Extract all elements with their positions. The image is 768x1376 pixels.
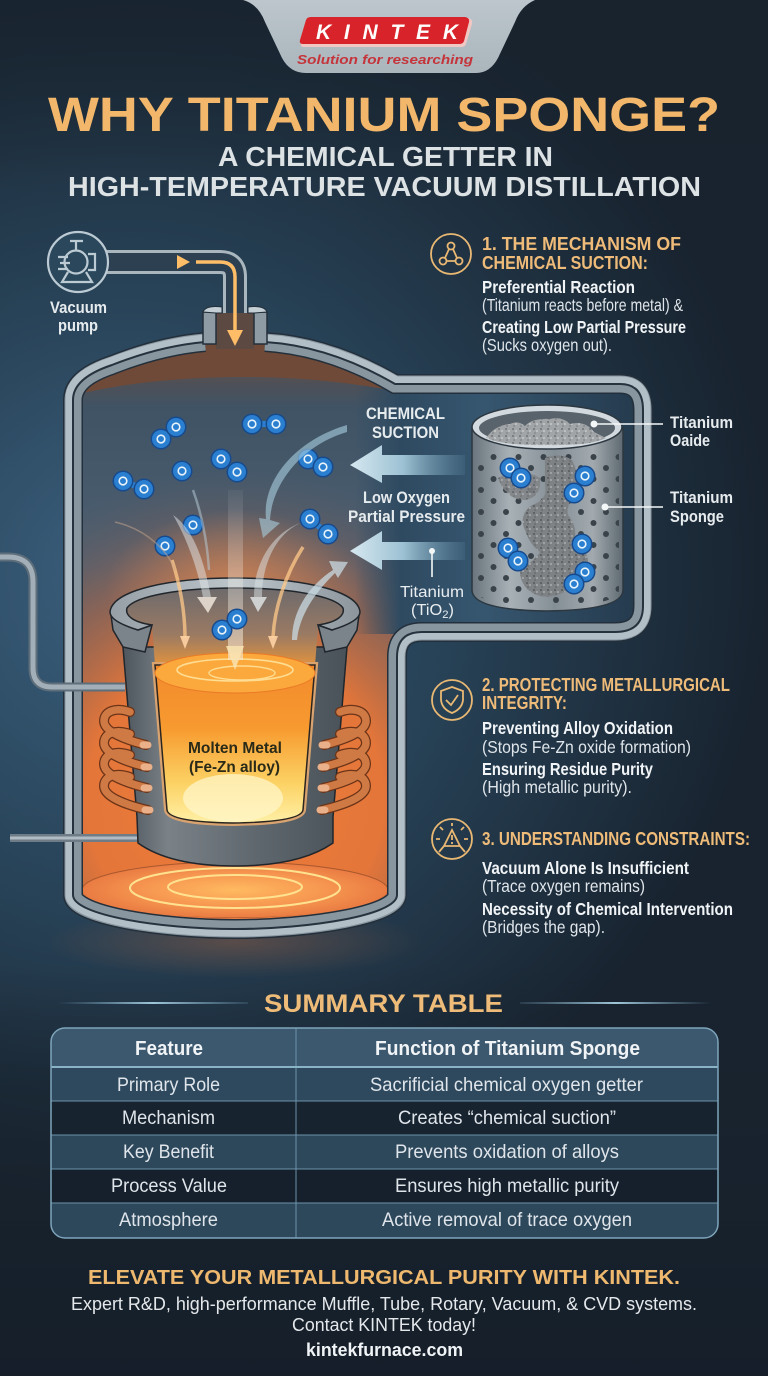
label: vacuum pump (50, 299, 107, 335)
induction coils (104, 710, 366, 810)
arrow: vacuum flow (118, 255, 243, 346)
chamber floor (83, 862, 387, 919)
section 3: constraints: Necessity of Chemical Intervention (482, 899, 733, 919)
logo: KINTEK badge: KINTEK (316, 21, 460, 44)
label: titanium oxide: Oaide (670, 432, 710, 450)
service pipes (0, 557, 137, 838)
label: low oxygen partial pressure: Low Oxygen (363, 489, 450, 507)
table body text: Sacrificial chemical oxygen getter (370, 1074, 643, 1096)
subtitle: HIGH-TEMPERATURE VACUUM DISTILLATION (68, 171, 701, 202)
section 3: constraints: (Bridges the gap). (482, 917, 605, 937)
section 1: mechanism: CHEMICAL SUCTION: (482, 253, 648, 273)
section 1: mechanism: Preferential Reaction (482, 277, 635, 297)
label: molten metal (188, 740, 282, 776)
table body text: Creates “chemical suction” (398, 1107, 616, 1129)
table body text: Atmosphere (119, 1209, 218, 1231)
basket rim and top sponge (472, 405, 622, 449)
label: low oxygen partial pressure: Partial Pressure (348, 508, 465, 526)
chamber wall (69, 338, 647, 933)
section 1: mechanism: (Sucks oxygen out). (482, 335, 612, 355)
section 1: mechanism: Creating Low Partial Pressure (482, 317, 686, 337)
section 1: mechanism: 1. THE MECHANISM OF (482, 234, 681, 254)
section 3: constraints (432, 819, 750, 937)
icon: alert beacon (432, 819, 472, 859)
crucible rim (110, 578, 360, 652)
title: WHY TITANIUM SPONGE? (48, 89, 720, 142)
table body text: Key Benefit (123, 1141, 215, 1163)
footer call to action: Expert R&D, high-performance Muffle, Tube, Rotary, Vacuum, & CVD systems. (71, 1293, 697, 1314)
table body text: Prevents oxidation of alloys (395, 1141, 619, 1163)
section 1: mechanism: (Titanium reacts before metal) & (482, 295, 683, 315)
oxygen molecule over crucible (212, 608, 248, 640)
exhaust pipe (100, 262, 254, 349)
label: molten metal: Molten Metal (188, 740, 282, 757)
table body text: Process Value (111, 1175, 227, 1197)
table header: Function of Titanium Sponge (375, 1038, 640, 1060)
sponge chunks (520, 455, 588, 597)
label: titanium TiO2 (400, 548, 464, 621)
crucible interior (127, 588, 343, 665)
label: chemical suction (366, 405, 445, 442)
summary table (51, 1028, 718, 1238)
section 3: constraints: (Trace oxygen remains) (482, 876, 645, 896)
table body text (111, 1074, 643, 1231)
label: titanium sponge: Sponge (670, 508, 724, 526)
section 2: protecting integrity: (Stops Fe-Zn oxide formation) (482, 737, 691, 757)
molten metal (155, 653, 315, 823)
logo plate (243, 0, 535, 73)
table header: Feature (135, 1038, 203, 1060)
label: titanium TiO2: (TiO (411, 602, 442, 619)
table rows (51, 1028, 718, 1238)
crucible body (123, 647, 347, 866)
footer call to action (71, 1267, 697, 1360)
label: low oxygen partial pressure (348, 489, 465, 526)
table body text: Ensures high metallic purity (395, 1175, 619, 1197)
label: titanium TiO2: Titanium (400, 584, 464, 601)
section 2: protecting integrity (432, 675, 730, 797)
suction flow streams (115, 425, 348, 670)
section 2: protecting integrity: (High metallic purity). (482, 777, 632, 797)
titanium sponge basket (470, 405, 626, 615)
arrow: chemical suction upper (350, 445, 465, 483)
label: chemical suction: SUCTION (372, 424, 439, 442)
subtitle: A CHEMICAL GETTER IN (218, 141, 553, 172)
logo tagline: Solution for researching (297, 53, 473, 67)
icon: shield check (432, 680, 472, 720)
logo: KINTEK badge (300, 17, 472, 47)
table body text: Primary Role (117, 1074, 220, 1096)
table header (135, 1038, 640, 1060)
table body text: Active removal of trace oxygen (382, 1209, 632, 1231)
neck flange (203, 307, 267, 344)
footer call to action: kintekfurnace.com (306, 1339, 463, 1360)
label: vacuum pump: Vacuum (50, 299, 107, 317)
section 2: protecting integrity: Ensuring Residue Purity (482, 759, 653, 779)
crucible (104, 578, 366, 866)
label: titanium sponge: Titanium (670, 489, 733, 507)
oxygen molecules (112, 414, 338, 556)
arrow: chemical suction lower (350, 531, 465, 570)
icon: molecule (431, 234, 471, 274)
label: titanium sponge (602, 489, 733, 526)
summary heading: SUMMARY TABLE (264, 990, 503, 1018)
footer call to action: ELEVATE YOUR METALLURGICAL PURITY WITH KINTEK. (88, 1267, 680, 1289)
section 2: protecting integrity: Preventing Alloy Oxidation (482, 718, 673, 738)
label: titanium TiO2: ) (449, 602, 454, 619)
label: titanium oxide: Titanium (670, 414, 733, 432)
vacuum pump icon (48, 232, 108, 292)
label: vacuum pump: pump (58, 317, 98, 335)
section 2: protecting integrity: INTEGRITY: (482, 693, 567, 713)
table body text: Mechanism (122, 1107, 215, 1129)
label: titanium TiO2: 2 (442, 609, 449, 621)
vacuum chamber (60, 335, 660, 945)
section 1: mechanism (431, 234, 686, 355)
label: molten metal: (Fe-Zn alloy) (189, 759, 280, 776)
captured oxygen (498, 458, 596, 594)
subtitle (68, 141, 701, 202)
section 3: constraints: Vacuum Alone Is Insufficient (482, 858, 689, 878)
footer call to action: Contact KINTEK today! (292, 1314, 476, 1335)
label: chemical suction: CHEMICAL (366, 405, 445, 423)
label: titanium oxide (590, 414, 733, 450)
chamber interior (83, 344, 633, 886)
